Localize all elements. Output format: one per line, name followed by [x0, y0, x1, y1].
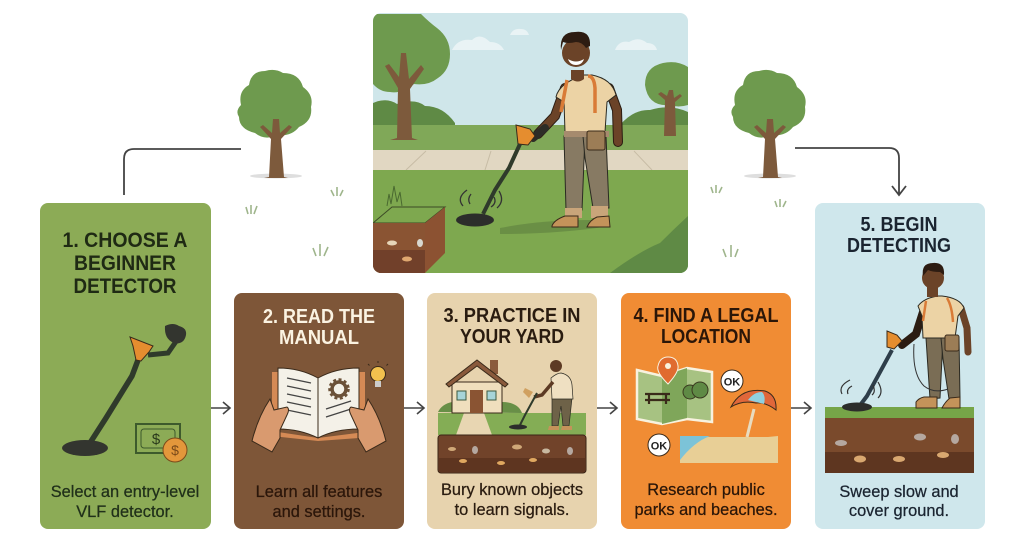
caption 1: VLF detector.	[76, 503, 174, 521]
arrow 4 to 5	[791, 402, 811, 414]
caption 3: Bury known objects	[441, 481, 583, 499]
hero scene: person detecting in a park	[373, 13, 688, 273]
heading 2: MANUAL	[279, 327, 359, 349]
caption 4: Research public	[647, 481, 765, 499]
caption 2: Learn all features	[256, 483, 382, 501]
heading 3: YOUR YARD	[460, 326, 564, 348]
connector arrow: step 1 up to hero	[124, 149, 241, 195]
icon: open book and hands	[252, 368, 386, 452]
connector arrow: hero down to step 5	[795, 148, 906, 195]
icon: small tree	[645, 62, 688, 136]
heading 3: 3. PRACTICE IN	[444, 305, 580, 327]
icon: metal detector	[62, 324, 186, 456]
heading 2: 2. READ THE	[263, 306, 375, 328]
panel 2: read the manual	[234, 293, 404, 529]
heading 5: DETECTING	[847, 235, 951, 257]
arrow 2 to 3	[404, 402, 424, 414]
callout: OK beach	[648, 434, 670, 456]
heading 1: DETECTOR	[74, 275, 176, 298]
icon: figure with detector	[509, 360, 573, 430]
panel 5: begin detecting	[815, 203, 985, 529]
callout: OK beach: OK	[651, 440, 667, 452]
hero figure with detector	[456, 32, 618, 234]
panel 4: find a legal location	[621, 293, 791, 529]
callout: OK park: OK	[724, 376, 740, 388]
heading 3	[444, 305, 580, 348]
heading 4: 4. FIND A LEGAL	[634, 305, 778, 327]
icon: map with pin	[637, 357, 712, 424]
icon: money: $	[171, 442, 179, 458]
heading 1: 1. CHOOSE A	[62, 229, 188, 252]
arrow 3 to 4	[597, 402, 617, 414]
panel 1: choose a beginner detector	[40, 203, 211, 529]
callout: OK park	[721, 370, 743, 392]
caption 2: and settings.	[273, 503, 365, 521]
caption 5: cover ground.	[849, 502, 949, 520]
soil cross-section	[825, 407, 974, 473]
icon: left tree	[237, 70, 312, 178]
heading 4	[634, 305, 778, 348]
caption 5: Sweep slow and	[839, 483, 959, 501]
icon: light bulb	[368, 361, 388, 387]
icon: large tree	[373, 14, 450, 140]
icon: house	[446, 360, 508, 413]
heading 1	[62, 229, 188, 298]
heading 2	[263, 306, 375, 349]
arrow 1 to 2	[211, 402, 230, 414]
icon: money	[136, 424, 187, 462]
icon: money: $	[152, 431, 161, 448]
icon: right tree	[731, 70, 806, 178]
soil cube	[373, 186, 445, 273]
heading 4: LOCATION	[661, 326, 751, 348]
yard ground and soil	[438, 402, 586, 473]
caption 1: Select an entry-level	[51, 483, 199, 501]
heading 1: BEGINNER	[74, 252, 176, 275]
grass tufts	[246, 185, 786, 257]
icon: figure with detector	[841, 263, 968, 412]
caption 4: parks and beaches.	[634, 501, 778, 519]
panel 3: practice in your yard	[427, 293, 597, 529]
caption 3: to learn signals.	[455, 501, 569, 519]
heading 5	[847, 214, 951, 257]
icon: beach with umbrella	[680, 390, 778, 463]
heading 5: 5. BEGIN	[860, 214, 938, 236]
